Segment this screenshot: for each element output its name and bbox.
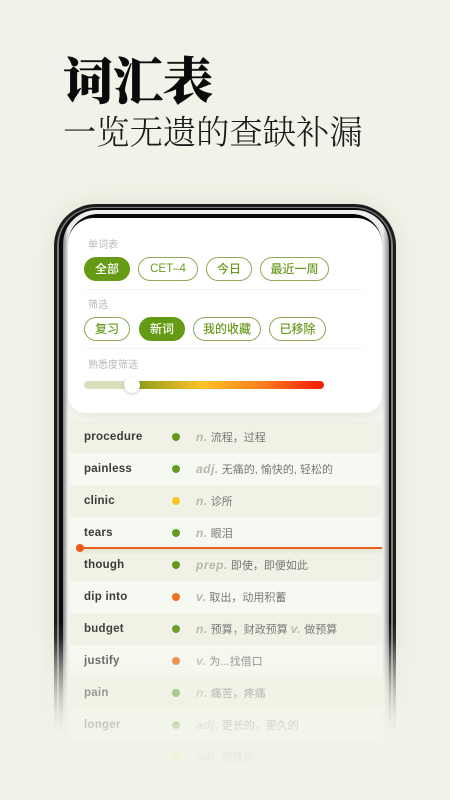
row: painless: adj. 无痛的, 愉快的, 轻松的 bbox=[196, 462, 333, 476]
row: clinic: n. 诊所 bbox=[196, 494, 233, 508]
pill: removed: 已移除 bbox=[279, 322, 316, 336]
pill: last week bbox=[260, 257, 329, 281]
right frame fade bbox=[382, 640, 402, 800]
pill: all bbox=[84, 257, 130, 281]
filter card contents bbox=[84, 239, 364, 396]
row: budget bbox=[70, 613, 382, 645]
pill: today: 今日 bbox=[217, 262, 241, 276]
row: justify bbox=[70, 645, 382, 677]
row: pain bbox=[70, 677, 382, 709]
row: dip into: dip into bbox=[84, 591, 128, 603]
pill: all: 全部 bbox=[95, 262, 119, 276]
row: procedure bbox=[70, 421, 382, 453]
row: faded: adj. 感性的 bbox=[196, 750, 255, 764]
row: clinic: clinic bbox=[84, 495, 115, 507]
pill: CET-4: CET–4 bbox=[150, 263, 186, 275]
progress marker line bbox=[76, 544, 382, 552]
subtitle: 一览无遗的查缺补漏 bbox=[63, 115, 363, 152]
row: faded bbox=[70, 741, 382, 773]
pill: removed bbox=[269, 317, 326, 341]
label: word list: 单词表 bbox=[88, 240, 118, 251]
row: dip into bbox=[70, 581, 382, 613]
pill: review: 复习 bbox=[95, 322, 119, 336]
row: budget: n. 预算，财政预算 v. 做预算 bbox=[196, 622, 337, 636]
slider thumb bbox=[124, 377, 140, 393]
row: justify: v. 为...找借口 bbox=[196, 654, 263, 668]
row: though bbox=[70, 549, 382, 581]
pill: favourites bbox=[193, 317, 261, 341]
row: longer: adj. 更长的，更久的 bbox=[196, 718, 299, 732]
row: though: prep. 即使，即便如此 bbox=[196, 558, 308, 572]
row: longer: longer bbox=[84, 719, 121, 731]
filter card bbox=[68, 218, 382, 413]
row: pain: pain bbox=[84, 687, 109, 699]
phone frame bbox=[54, 204, 396, 800]
row: painless: painless bbox=[84, 463, 132, 475]
row: tears: tears bbox=[84, 527, 113, 539]
row: tears: n. 眼泪 bbox=[196, 526, 233, 540]
row: pain: n. 痛苦，疼痛 bbox=[196, 686, 266, 700]
row: painless bbox=[70, 453, 382, 485]
row: though: though bbox=[84, 559, 124, 571]
title: 词汇表 bbox=[63, 54, 213, 110]
row: procedure: procedure bbox=[84, 431, 142, 443]
row: tears bbox=[70, 517, 382, 549]
row: budget: budget bbox=[84, 623, 124, 635]
pill: new words bbox=[139, 317, 185, 341]
label: familiarity filter: 熟悉度筛选 bbox=[88, 360, 138, 371]
left frame fade bbox=[48, 640, 70, 800]
pill: last week: 最近一周 bbox=[270, 262, 318, 276]
pill: favourites: 我的收藏 bbox=[203, 322, 251, 336]
label: filter: 筛选 bbox=[88, 300, 108, 311]
row: clinic bbox=[70, 485, 382, 517]
pill: review bbox=[84, 317, 130, 341]
row: longer bbox=[70, 709, 382, 741]
pill: new words: 新词 bbox=[150, 322, 174, 336]
row: dip into: v. 取出，动用积蓄 bbox=[196, 590, 286, 604]
row: justify: justify bbox=[84, 655, 120, 667]
pill: today bbox=[206, 257, 252, 281]
bottom fade bbox=[0, 622, 450, 800]
familiarity slider bbox=[84, 376, 324, 396]
pill: CET-4 bbox=[138, 257, 198, 281]
row: procedure: n. 流程，过程 bbox=[196, 430, 266, 444]
